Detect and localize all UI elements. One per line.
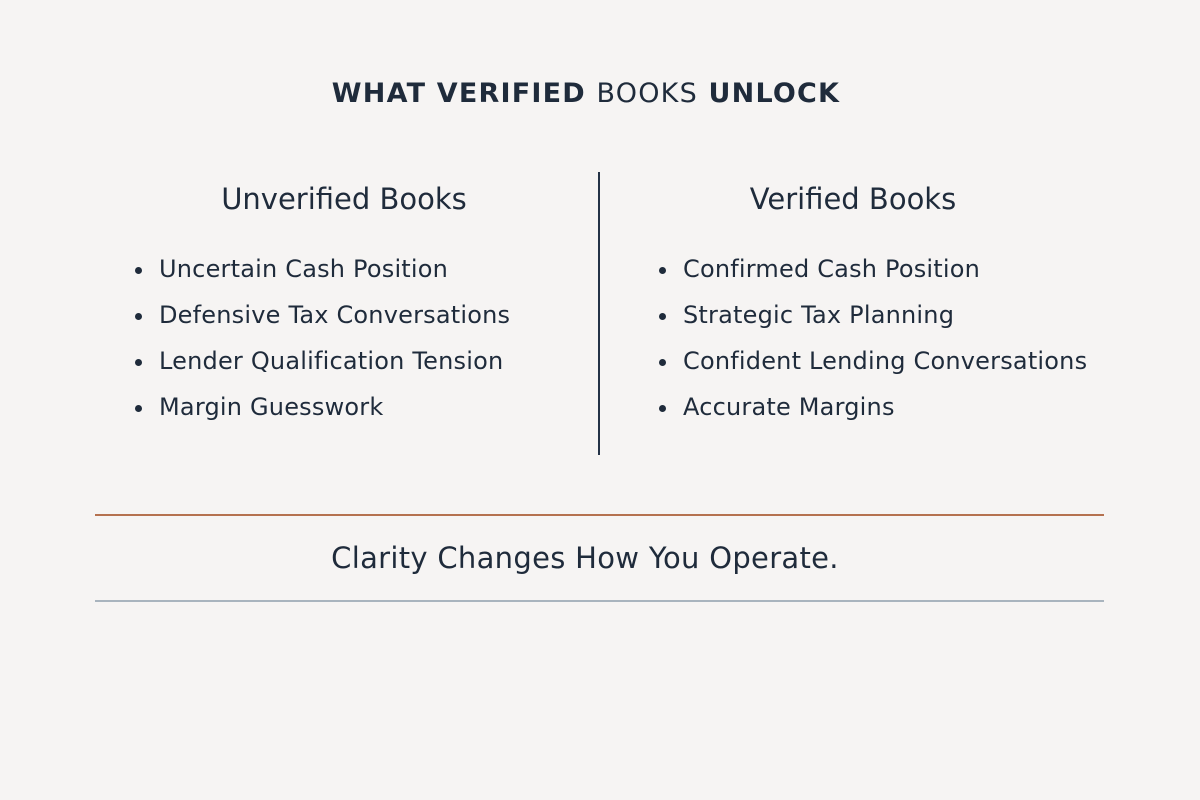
divider: vertical xyxy=(598,172,600,455)
list: unverified items xyxy=(135,255,510,421)
panel: unverified books xyxy=(135,182,510,421)
heading: unverified: Unverified Books xyxy=(221,182,467,216)
list: verified items: Strategic Tax Planning xyxy=(683,301,954,329)
list: unverified items: Lender Qualification Tension xyxy=(159,347,503,375)
heading: verified: Verified Books xyxy=(750,182,956,216)
list: unverified items: Margin Guesswork xyxy=(159,393,383,421)
list: verified items: Confirmed Cash Position xyxy=(683,255,980,283)
list: verified items xyxy=(659,255,1087,421)
title: WHAT VERIFIED BOOKS UNLOCK xyxy=(332,78,840,109)
list: unverified items: Uncertain Cash Position xyxy=(159,255,448,283)
list: verified items: Accurate Margins xyxy=(683,393,895,421)
panel: verified books xyxy=(659,182,1087,421)
tagline: Clarity Changes How You Operate. xyxy=(331,541,839,575)
list: unverified items: Defensive Tax Conversations xyxy=(159,301,510,329)
list: verified items: Confident Lending Conversations xyxy=(683,347,1087,375)
